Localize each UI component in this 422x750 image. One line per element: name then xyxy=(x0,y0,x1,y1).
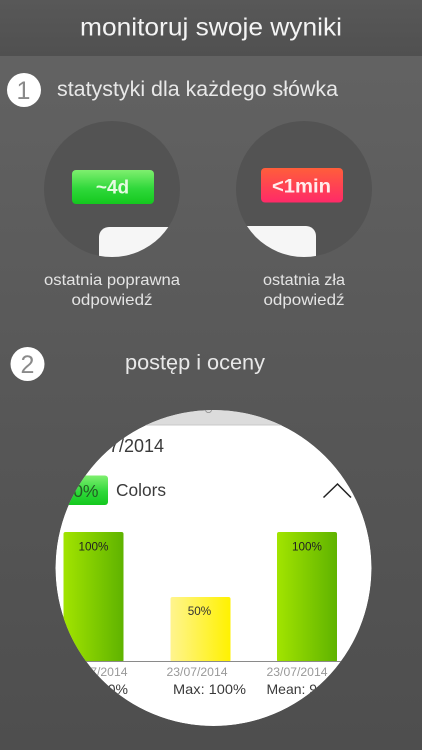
panel: magnified results screen xyxy=(40,405,380,726)
caption: ostatnia zła xyxy=(263,272,345,289)
panel: last correct answer xyxy=(44,121,189,309)
white card fragment xyxy=(99,227,168,257)
deck name: Colors xyxy=(116,480,166,500)
summary stats: Max: 100% xyxy=(173,681,246,697)
badge: number 2: 2 xyxy=(21,351,34,379)
panel: last wrong answer xyxy=(226,121,372,309)
score chip: 100% xyxy=(54,481,98,501)
chevron xyxy=(324,484,351,498)
bar 3: 100% xyxy=(292,540,322,554)
badge: number 1 xyxy=(7,73,41,107)
date labels: 23/07/2014 xyxy=(66,667,128,679)
date labels: 23/07/2014 xyxy=(166,667,228,679)
heading: statistics for each word: statystyki dla każdego słówka xyxy=(57,78,338,101)
bar 1 xyxy=(64,532,124,662)
score chip xyxy=(68,476,108,505)
badge: number 1: 1 xyxy=(17,77,30,105)
white card fragment xyxy=(247,226,316,257)
bar 2 xyxy=(170,597,230,662)
green badge xyxy=(72,170,154,204)
date labels xyxy=(91,667,328,676)
summary stats: Mean: 91% xyxy=(266,681,337,697)
red badge: <1min xyxy=(272,176,331,198)
caption: odpowiedź xyxy=(264,292,344,309)
date heading: 23/07/2014 xyxy=(74,436,164,456)
date labels: 23/07/2014 xyxy=(266,667,328,679)
bar 1: 100% xyxy=(79,540,108,554)
axis xyxy=(86,661,341,662)
caption: ostatnia poprawna xyxy=(44,272,180,289)
summary stats xyxy=(109,684,320,694)
summary stats: Min: 50% xyxy=(70,681,128,697)
bar 3 xyxy=(277,532,337,662)
bar chart xyxy=(64,532,341,694)
dark circle left xyxy=(44,121,180,257)
grey nav bar xyxy=(146,410,280,425)
heading: progress and grades: postęp i oceny xyxy=(125,352,266,374)
caption: odpowiedź xyxy=(72,292,152,309)
title: monitoruj swoje wyniki xyxy=(80,14,342,42)
bar 2: 50% xyxy=(188,605,211,618)
header band xyxy=(0,0,422,56)
green badge: ~4d xyxy=(96,178,129,198)
badge: number 2 xyxy=(10,347,44,381)
red badge xyxy=(261,168,343,202)
dark circle right xyxy=(236,121,372,257)
